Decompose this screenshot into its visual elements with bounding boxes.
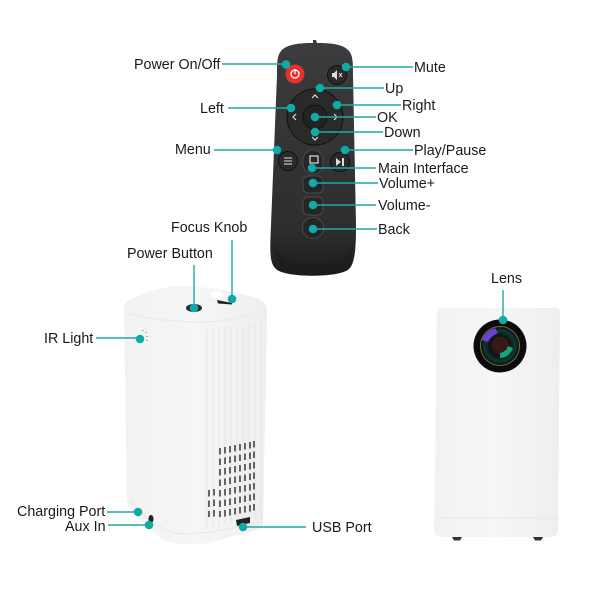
callout: Down [311,125,421,141]
callout: Play/Pause: Play/Pause [414,143,486,159]
callout: USB Port: USB Port [312,520,372,536]
callout: Up: Up [385,81,403,97]
power button hole [186,304,202,312]
lower vent holes [209,489,214,517]
callout: Aux In [65,519,153,535]
callout: IR Light: IR Light [44,331,93,347]
callout: Charging Port: Charging Port [17,504,105,520]
side body [124,286,267,544]
callout: IR Light [44,331,144,347]
callout: Right: Right [402,98,435,114]
remote shading [275,245,353,275]
callout: Play/Pause [341,143,486,159]
focus knob [210,291,232,304]
feet [452,537,543,540]
callout: Lens [491,271,522,324]
callout: Mute [342,60,446,76]
callout: Left [200,101,295,117]
callout: Mute: Mute [414,60,446,76]
bottom seam [130,500,263,534]
play pause button [330,152,350,172]
top edge [125,309,266,322]
IR light [143,330,147,341]
back button [302,218,324,238]
callout: Menu: Menu [175,142,211,158]
callout: Volume-: Volume- [378,198,431,214]
navigation ring [287,89,343,145]
callout: Power Button [127,246,213,312]
callout: Right [333,98,435,114]
callout: Menu [175,142,281,158]
callout: Lens: Lens [491,271,522,287]
USB port [236,517,250,526]
aux port [148,515,154,523]
projector front view [434,308,560,540]
callout: USB Port [239,520,372,536]
main interface button [303,150,323,174]
callout: OK [311,110,398,126]
volume minus button [303,197,323,215]
callout: Left: Left [200,101,224,117]
callout: Back [309,222,411,238]
remote body [270,40,356,276]
callout: Power Button: Power Button [127,246,213,262]
callout: Volume+: Volume+ [379,176,435,192]
remote control [270,40,356,276]
volume plus button [303,176,323,193]
callout: Main Interface [308,161,469,177]
mute button [328,66,346,84]
callout: Focus Knob: Focus Knob [171,220,247,236]
lens [474,320,526,372]
power button [286,64,304,84]
callout: OK: OK [377,110,398,126]
callout: Down: Down [384,125,421,141]
callout: Main Interface: Main Interface [378,161,469,177]
menu button [278,152,298,170]
callout: Focus Knob [171,220,247,303]
ribs [207,318,261,528]
callout: Back: Back [378,222,411,238]
callout: Power On/Off [134,57,290,73]
callout: Volume- [309,198,431,214]
callout: Aux In: Aux In [65,519,106,535]
base seam [436,517,559,519]
callout: Up [316,81,403,97]
vent holes [220,441,254,517]
callout: Volume+ [309,176,435,192]
front body [434,308,560,537]
callout: Power On/Off: Power On/Off [134,57,220,73]
projector side view [124,286,267,544]
